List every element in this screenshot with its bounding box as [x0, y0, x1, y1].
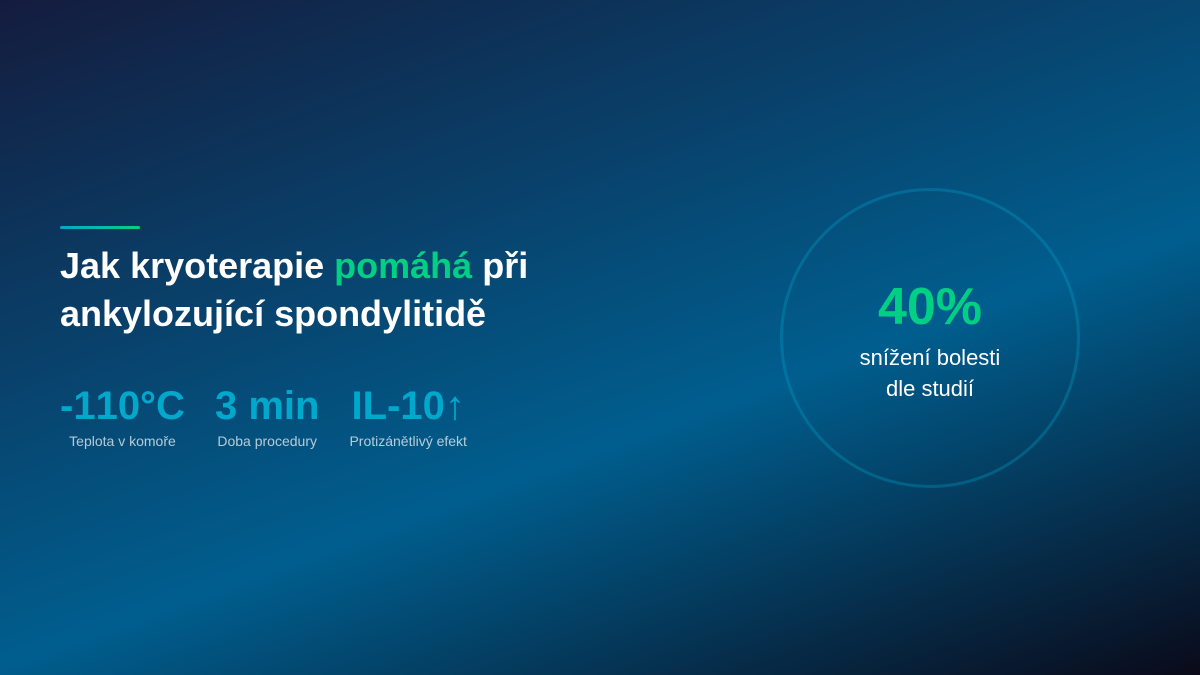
stat: IL-10 — [349, 384, 467, 449]
stat: temperature — [60, 384, 185, 449]
stat: duration: 3 min — [215, 384, 319, 428]
stats row — [60, 384, 467, 449]
stat: duration: Doba procedury — [217, 433, 317, 449]
percentage description — [860, 345, 1000, 401]
big percentage: 40% — [878, 278, 982, 336]
stat: temperature: -110°C — [60, 384, 185, 428]
percentage description: dle studií — [886, 376, 974, 401]
title: Jak kryoterapie pomáhá při — [60, 245, 528, 286]
stat: temperature: Teplota v komoře — [69, 433, 176, 449]
accent line — [60, 226, 140, 229]
stat: duration — [215, 384, 319, 449]
stat: IL-10: Protizánětlivý efekt — [349, 433, 467, 449]
percentage description: snížení bolesti — [860, 345, 1000, 370]
title: ankylozující spondylitidě — [60, 293, 486, 334]
circle callout: pain reduction — [780, 188, 1080, 488]
title — [60, 245, 528, 334]
stat: IL-10: IL-10↑ — [352, 384, 465, 428]
